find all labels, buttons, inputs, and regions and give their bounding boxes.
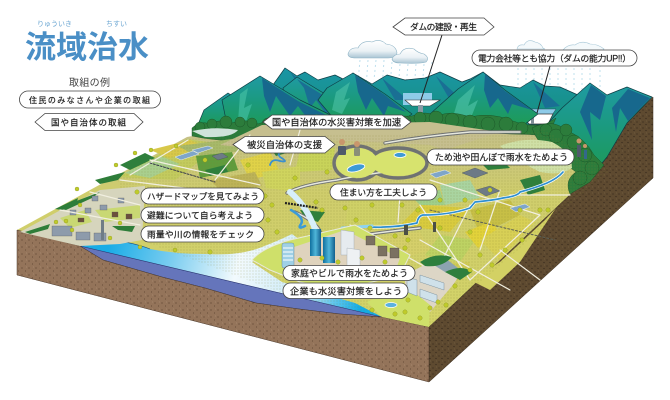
callout: power companies cooperate: 電力会社等とも協力（ダムの能力UP!!） (478, 52, 631, 64)
callout: support for affected municipalities (233, 136, 335, 153)
park: twin loop ponds (336, 148, 425, 178)
callout: accelerate national and local measures (263, 115, 411, 129)
callout: accelerate national and local measures: 国や自治体の水災害対策を加速 (272, 116, 401, 128)
title: りゅういき (37, 20, 72, 28)
river sea mouth (80, 234, 382, 317)
callout: think about evacuation: 避難について自ら考えよう (147, 210, 253, 220)
legend: examples of initiatives: 取組の例 (69, 76, 110, 89)
callout: businesses prepare too (283, 283, 408, 298)
callout: dam construction and regeneration (393, 18, 494, 103)
legend: examples of initiatives: 国や自治体の取組 (51, 118, 126, 128)
dam: rear dam and lake (403, 93, 440, 115)
rivers (270, 152, 563, 262)
callout: adapt how you live: 住まい方を工夫しよう (340, 186, 427, 198)
callout: businesses prepare too: 企業も水災害対策をしよう (290, 286, 402, 296)
cliff: right earth face (429, 97, 653, 382)
town: left residential district (20, 172, 145, 246)
reservoir meadow under right ridge (500, 140, 572, 173)
rain clouds (348, 40, 604, 98)
callout: think about evacuation (141, 207, 264, 223)
dam: front right dam and lake (521, 109, 556, 124)
fields: patches (117, 122, 610, 327)
pale water strip by forest (192, 128, 238, 137)
callout: store rainwater in ponds and paddies: ため池や田んぼで雨水をためよう (435, 152, 568, 162)
cliff: front earth face (17, 230, 429, 382)
callout: check the hazard map (141, 188, 264, 204)
title: ちすい (106, 20, 127, 28)
callout: store rainwater at homes and buildings: 家庭やビルで雨水をためよう (291, 268, 408, 278)
callout: support for affected municipalities: 被災自治体の支援 (247, 139, 322, 150)
roads (60, 130, 570, 290)
bridge (285, 203, 318, 208)
callout: check rain and river information (141, 226, 264, 242)
callout: check rain and river information: 雨量や川の情報をチェック (147, 228, 254, 240)
forest belt at foot of mountains (192, 111, 604, 194)
mountains: right ridge (540, 83, 652, 178)
city: downtown base and towers (252, 225, 410, 290)
factories and solar fields (175, 146, 530, 212)
callout: store rainwater at homes and buildings (283, 266, 415, 280)
trees (54, 144, 550, 320)
callout: check the hazard map: ハザードマップを見てみよう (147, 192, 259, 202)
callout: power companies cooperate (472, 50, 637, 113)
callout: adapt how you live (330, 184, 437, 200)
legend: examples of initiatives (20, 76, 160, 130)
mountains: back range (268, 68, 590, 125)
legend: examples of initiatives: 住民のみなさんや企業の取組 (29, 95, 150, 105)
ground plain (17, 122, 610, 327)
city: lower apartments and park (367, 255, 472, 327)
mountains: front range (197, 72, 538, 130)
callout: dam construction and regeneration: ダムの建設・再生 (410, 21, 477, 32)
callout: store rainwater in ponds and paddies (427, 149, 574, 165)
title: 流域治水 (25, 30, 149, 65)
people illustrations (338, 138, 587, 235)
